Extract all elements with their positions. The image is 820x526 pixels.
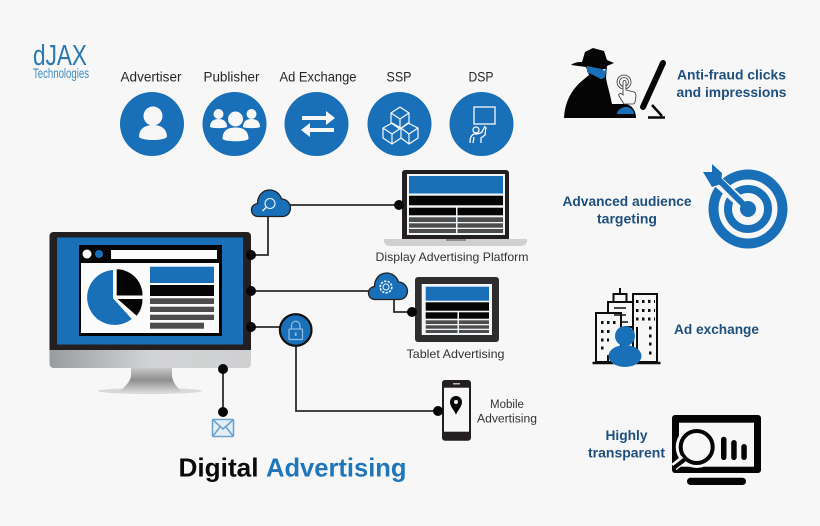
browser window [79, 245, 222, 336]
role: Advertiser: Advertiser [120, 70, 182, 84]
text: Anti-fraud clicks [677, 66, 786, 82]
text: and impressions [676, 84, 787, 100]
text [562, 193, 692, 226]
icon: buildings with person [592, 288, 660, 367]
icon: analytics screen with magnifier [672, 415, 761, 485]
logo: dJAX Technologies [33, 40, 89, 81]
role: SSP: SSP [386, 70, 412, 84]
text: Ad exchange [674, 321, 759, 337]
label: mobile advertising: Mobile [490, 399, 524, 411]
table bars [150, 267, 214, 329]
text [676, 66, 787, 100]
role: Publisher [202, 70, 266, 156]
label: mobile advertising [477, 399, 537, 426]
title: Digital Advertising: Advertising [266, 452, 406, 482]
logo: dJAX Technologies: dJAX [33, 40, 87, 72]
monitor shadow [98, 388, 202, 394]
title: Digital Advertising: Digital [178, 452, 258, 482]
role: Advertiser [120, 70, 184, 156]
text: targeting [597, 210, 657, 226]
feature: advanced audience targeting [562, 164, 782, 244]
desktop monitor [49, 232, 256, 417]
feature: anti-fraud clicks and impressions [564, 48, 787, 118]
role: DSP [450, 70, 514, 156]
icon: cloud settings [368, 273, 408, 300]
icon: hacker at computer [564, 48, 665, 118]
icon: target with arrow [703, 164, 782, 244]
pie chart [87, 269, 143, 325]
monitor bezel [49, 232, 251, 350]
icon: tablet [407, 277, 499, 342]
label: tablet advertising: Tablet Advertising [406, 347, 504, 361]
role: Publisher: Publisher [204, 70, 260, 84]
feature: highly transparent [588, 415, 761, 485]
text: transparent [588, 444, 665, 460]
role: DSP: DSP [468, 70, 494, 84]
icon: cloud search [252, 190, 290, 216]
text [588, 427, 665, 460]
monitor stand [119, 368, 182, 392]
feature: ad exchange [592, 288, 759, 367]
role: Ad Exchange [280, 70, 356, 156]
text: Highly [606, 427, 648, 443]
monitor chin [50, 345, 251, 368]
role: Ad Exchange: Ad Exchange [280, 70, 356, 84]
text: Advanced audience [562, 193, 692, 209]
panel: role icons row [120, 70, 514, 156]
monitor screen [57, 238, 243, 344]
role: SSP [368, 70, 432, 156]
label: display advertising platform: Display Advertising Platform [376, 250, 529, 264]
icon: envelope [212, 420, 234, 436]
connector lines [223, 205, 438, 412]
label: mobile advertising: Advertising [477, 414, 537, 426]
icon: lock [280, 314, 312, 346]
port dots [218, 250, 256, 417]
title: Digital Advertising [178, 452, 406, 482]
logo: dJAX Technologies: Technologies [33, 65, 89, 81]
icon: laptop [384, 170, 527, 246]
icon: clicking hand [617, 75, 636, 104]
icon: mobile phone [433, 380, 471, 441]
